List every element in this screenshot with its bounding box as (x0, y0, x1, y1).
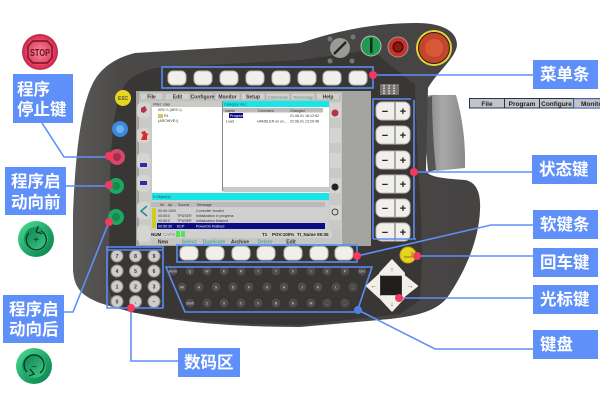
message window: TPUSER (177, 214, 192, 218)
menu bar screenshot strip: Configure (541, 101, 572, 108)
icon: stop button (22, 34, 58, 70)
keyboard: H (283, 286, 286, 290)
enter key (400, 247, 416, 263)
keyboard: W (205, 270, 209, 274)
keyboard: G (266, 286, 269, 290)
file list windows: Name (225, 109, 235, 113)
menu bar screenshot strip (469, 98, 600, 108)
key switch (328, 34, 356, 64)
keyboard: . (345, 302, 346, 306)
message window: Message (197, 203, 212, 207)
keyboard: S (215, 286, 218, 290)
file list windows: KRC:\\ (ARC:\) (158, 108, 182, 112)
icon: stop button: STOP (30, 48, 50, 59)
menu bar on screen (140, 93, 340, 100)
file list windows: 0 Object(s) (153, 195, 171, 199)
label: numeric area: 数码区 (184, 353, 234, 372)
keyboard: V (257, 302, 260, 306)
keyboard: M (310, 302, 313, 306)
message window: PowerOn finished (196, 224, 224, 228)
numeric keypad: 4 (116, 269, 119, 275)
keyboard: Num (169, 270, 177, 274)
status line: POV:100% (272, 232, 294, 237)
menu bar on screen: Commands (268, 94, 288, 100)
status keys: + (400, 203, 406, 215)
cursor keys: → (406, 283, 414, 290)
label: cursor keys (533, 285, 598, 314)
file list windows: Category: ALL (224, 102, 247, 106)
label: program stop key (13, 74, 73, 123)
status keys: − (382, 227, 388, 239)
arrow: program backward (64, 218, 113, 312)
cursor keys: ← (370, 283, 378, 290)
soft key bar on screen: Edit (286, 240, 296, 246)
menu bar on screen: Monitor (218, 94, 237, 100)
message window: Nr. (160, 203, 165, 207)
keyboard: C (240, 302, 243, 306)
label: soft key bar (533, 210, 598, 239)
label: program start forward (5, 167, 66, 215)
keyboard: U (292, 270, 295, 274)
soft key bar on screen: Archive (231, 240, 249, 246)
icon: program forward start: + (33, 235, 39, 246)
label: soft key bar: 软键条 (540, 214, 590, 234)
label: keyboard (533, 330, 598, 359)
message window: TPUSER (177, 219, 192, 223)
file list windows: 22.08.01 13:20:48 (290, 120, 319, 124)
label: enter key: 回车键 (540, 252, 590, 272)
label: menu bar (533, 60, 598, 89)
keyboard: T (257, 270, 260, 274)
label: program start backward: 动向后 (9, 320, 58, 339)
status keys: − (382, 179, 388, 191)
message window: 00:00:1000 (158, 209, 176, 213)
numeric keypad: . (135, 300, 137, 306)
menu bar on screen: Edit (173, 94, 183, 100)
numeric keypad: 2 (134, 284, 137, 290)
label: status keys (532, 155, 597, 184)
status line: 09:35 (317, 232, 329, 237)
message window: Initialization finished (196, 219, 228, 223)
numeric keypad: 3 (153, 284, 156, 290)
status keys (373, 99, 416, 241)
status keys: + (400, 179, 406, 191)
arrow: program forward (66, 181, 113, 189)
soft key bar on screen: New (158, 240, 168, 246)
emergency stop (416, 30, 452, 66)
status line: TI_Name (297, 232, 316, 237)
status line: NUM (151, 232, 161, 237)
keyboard (166, 266, 372, 312)
file list windows: 21.08.01 16:12:52 (290, 114, 319, 118)
keyboard: O (326, 270, 329, 274)
keyboard: L (335, 286, 337, 290)
message window: 00:50:0 (158, 214, 170, 218)
icon: program backward start (16, 348, 52, 384)
status keys: − (382, 155, 388, 167)
keyboard: E (223, 270, 226, 274)
cursor keys (367, 260, 417, 311)
status keys: + (400, 155, 406, 167)
keyboard: Q (189, 270, 192, 274)
file list windows: R1 (164, 114, 169, 118)
file list windows: Filter: User (153, 102, 171, 106)
arrow: enter key (413, 252, 533, 260)
label: program stop key: 停止键 (17, 99, 67, 119)
message window: KCP (177, 224, 185, 228)
keyboard: I (311, 270, 312, 274)
screen panel (136, 91, 371, 246)
status keys: + (400, 227, 406, 239)
keyboard: Alt (180, 286, 185, 290)
arrow: cursor keys (395, 294, 533, 302)
menu bar screenshot strip: Program (509, 101, 536, 108)
status keys: − (382, 130, 388, 142)
menu bar screenshot strip: File (481, 101, 493, 108)
status line: T1 (262, 232, 268, 237)
arrow: numeric area (127, 304, 178, 361)
arrow: soft key bar (353, 225, 533, 260)
status line (150, 230, 332, 238)
soft keys (177, 245, 357, 262)
message window: Initialization in progress (196, 214, 234, 218)
soft key bar on screen: Delete (257, 240, 273, 246)
numeric keypad: 9 (153, 254, 156, 260)
arrow: program stop key (42, 123, 113, 160)
label: enter key (533, 248, 598, 277)
soft key bar on screen: Duplicate (203, 240, 225, 246)
keyboard: F (248, 286, 250, 290)
left soft keys on screen (137, 103, 150, 242)
keyboard: D (232, 286, 235, 290)
cursor keys: ↓ (390, 301, 394, 308)
message window: 00:50:30 (158, 224, 172, 228)
menu bar on screen: Setup (246, 94, 260, 100)
left side buttons: ESC (118, 96, 129, 102)
label: numeric area (178, 348, 240, 377)
keyboard: ; (352, 286, 354, 290)
label: program start backward: 程序启 (9, 299, 58, 319)
label: menu bar: 菜单条 (540, 64, 590, 84)
status keys: + (400, 106, 406, 118)
file list windows: Changed (290, 109, 305, 113)
menu bar on screen: Help (323, 94, 333, 100)
numeric keypad: 7 (116, 254, 119, 260)
keyboard: J (301, 286, 303, 290)
keyboard: K (317, 286, 320, 290)
keyboard: , (327, 302, 328, 306)
numeric keypad: 5 (134, 269, 137, 275)
file list windows: Program (230, 114, 244, 118)
label: status keys: 状态键 (539, 159, 589, 179)
soft key bar on screen: Select (182, 240, 197, 246)
numeric keypad (106, 247, 164, 308)
label: program start backward (3, 295, 64, 343)
menu bar on screen: Technology (293, 94, 313, 100)
numeric keypad: 6 (153, 269, 156, 275)
numeric keypad: 8 (134, 254, 137, 260)
left side buttons (108, 90, 131, 225)
file list windows: (ARCHIVE:\) (158, 119, 178, 123)
status line: CAPS (163, 232, 175, 237)
message window: 00:50:0 (158, 219, 170, 223)
file list windows (152, 101, 329, 200)
arrow: menu bar (369, 71, 533, 79)
file list windows: Comment (258, 109, 274, 113)
message window: Ap (168, 203, 172, 207)
handle grip (420, 95, 465, 172)
status keys: + (400, 130, 406, 142)
red stop switch (388, 37, 408, 57)
arrow: status keys (410, 168, 532, 176)
keyboard: Y (275, 270, 278, 274)
top controls (328, 30, 452, 95)
keyboard: N (292, 302, 295, 306)
keyboard: B (275, 302, 278, 306)
keyboard: X (223, 302, 226, 306)
soft key bar on screen (151, 238, 331, 246)
label: cursor keys: 光标键 (540, 290, 590, 309)
connector (380, 84, 399, 95)
right soft keys on screen (330, 103, 341, 244)
file list windows: HANDLER on ex... (257, 120, 287, 124)
numeric keypad: 1 (116, 284, 119, 290)
message window (151, 201, 329, 230)
icon: program forward start (18, 221, 54, 257)
keyboard: Z (206, 302, 208, 306)
pendant body (73, 23, 480, 327)
numeric keypad: 0 (116, 300, 119, 306)
green start switch (361, 36, 381, 56)
keyboard: Shift (186, 302, 195, 306)
label: program stop key: 程序 (17, 79, 50, 99)
keyboard: R (240, 270, 243, 274)
numeric keypad: − (153, 300, 156, 306)
label: program start forward: 程序启 (11, 171, 60, 191)
keyboard: Del (359, 270, 365, 274)
icon: program backward start: − (31, 362, 37, 373)
keyboard: P (344, 270, 347, 274)
menu bar on screen: File (147, 94, 156, 100)
keyboard: A (198, 286, 201, 290)
message window: Source (178, 203, 189, 207)
status keys: − (382, 203, 388, 215)
arrow: keyboard (354, 306, 533, 349)
status keys: − (382, 106, 388, 118)
menu keys (162, 67, 373, 88)
label: keyboard: 键盘 (540, 334, 573, 354)
cursor keys: ↑ (390, 267, 394, 274)
label: program start forward: 动向前 (11, 193, 60, 212)
file list windows: Load (226, 120, 234, 124)
message window: Controller booted (196, 209, 224, 213)
menu bar on screen: Configure (191, 94, 215, 100)
